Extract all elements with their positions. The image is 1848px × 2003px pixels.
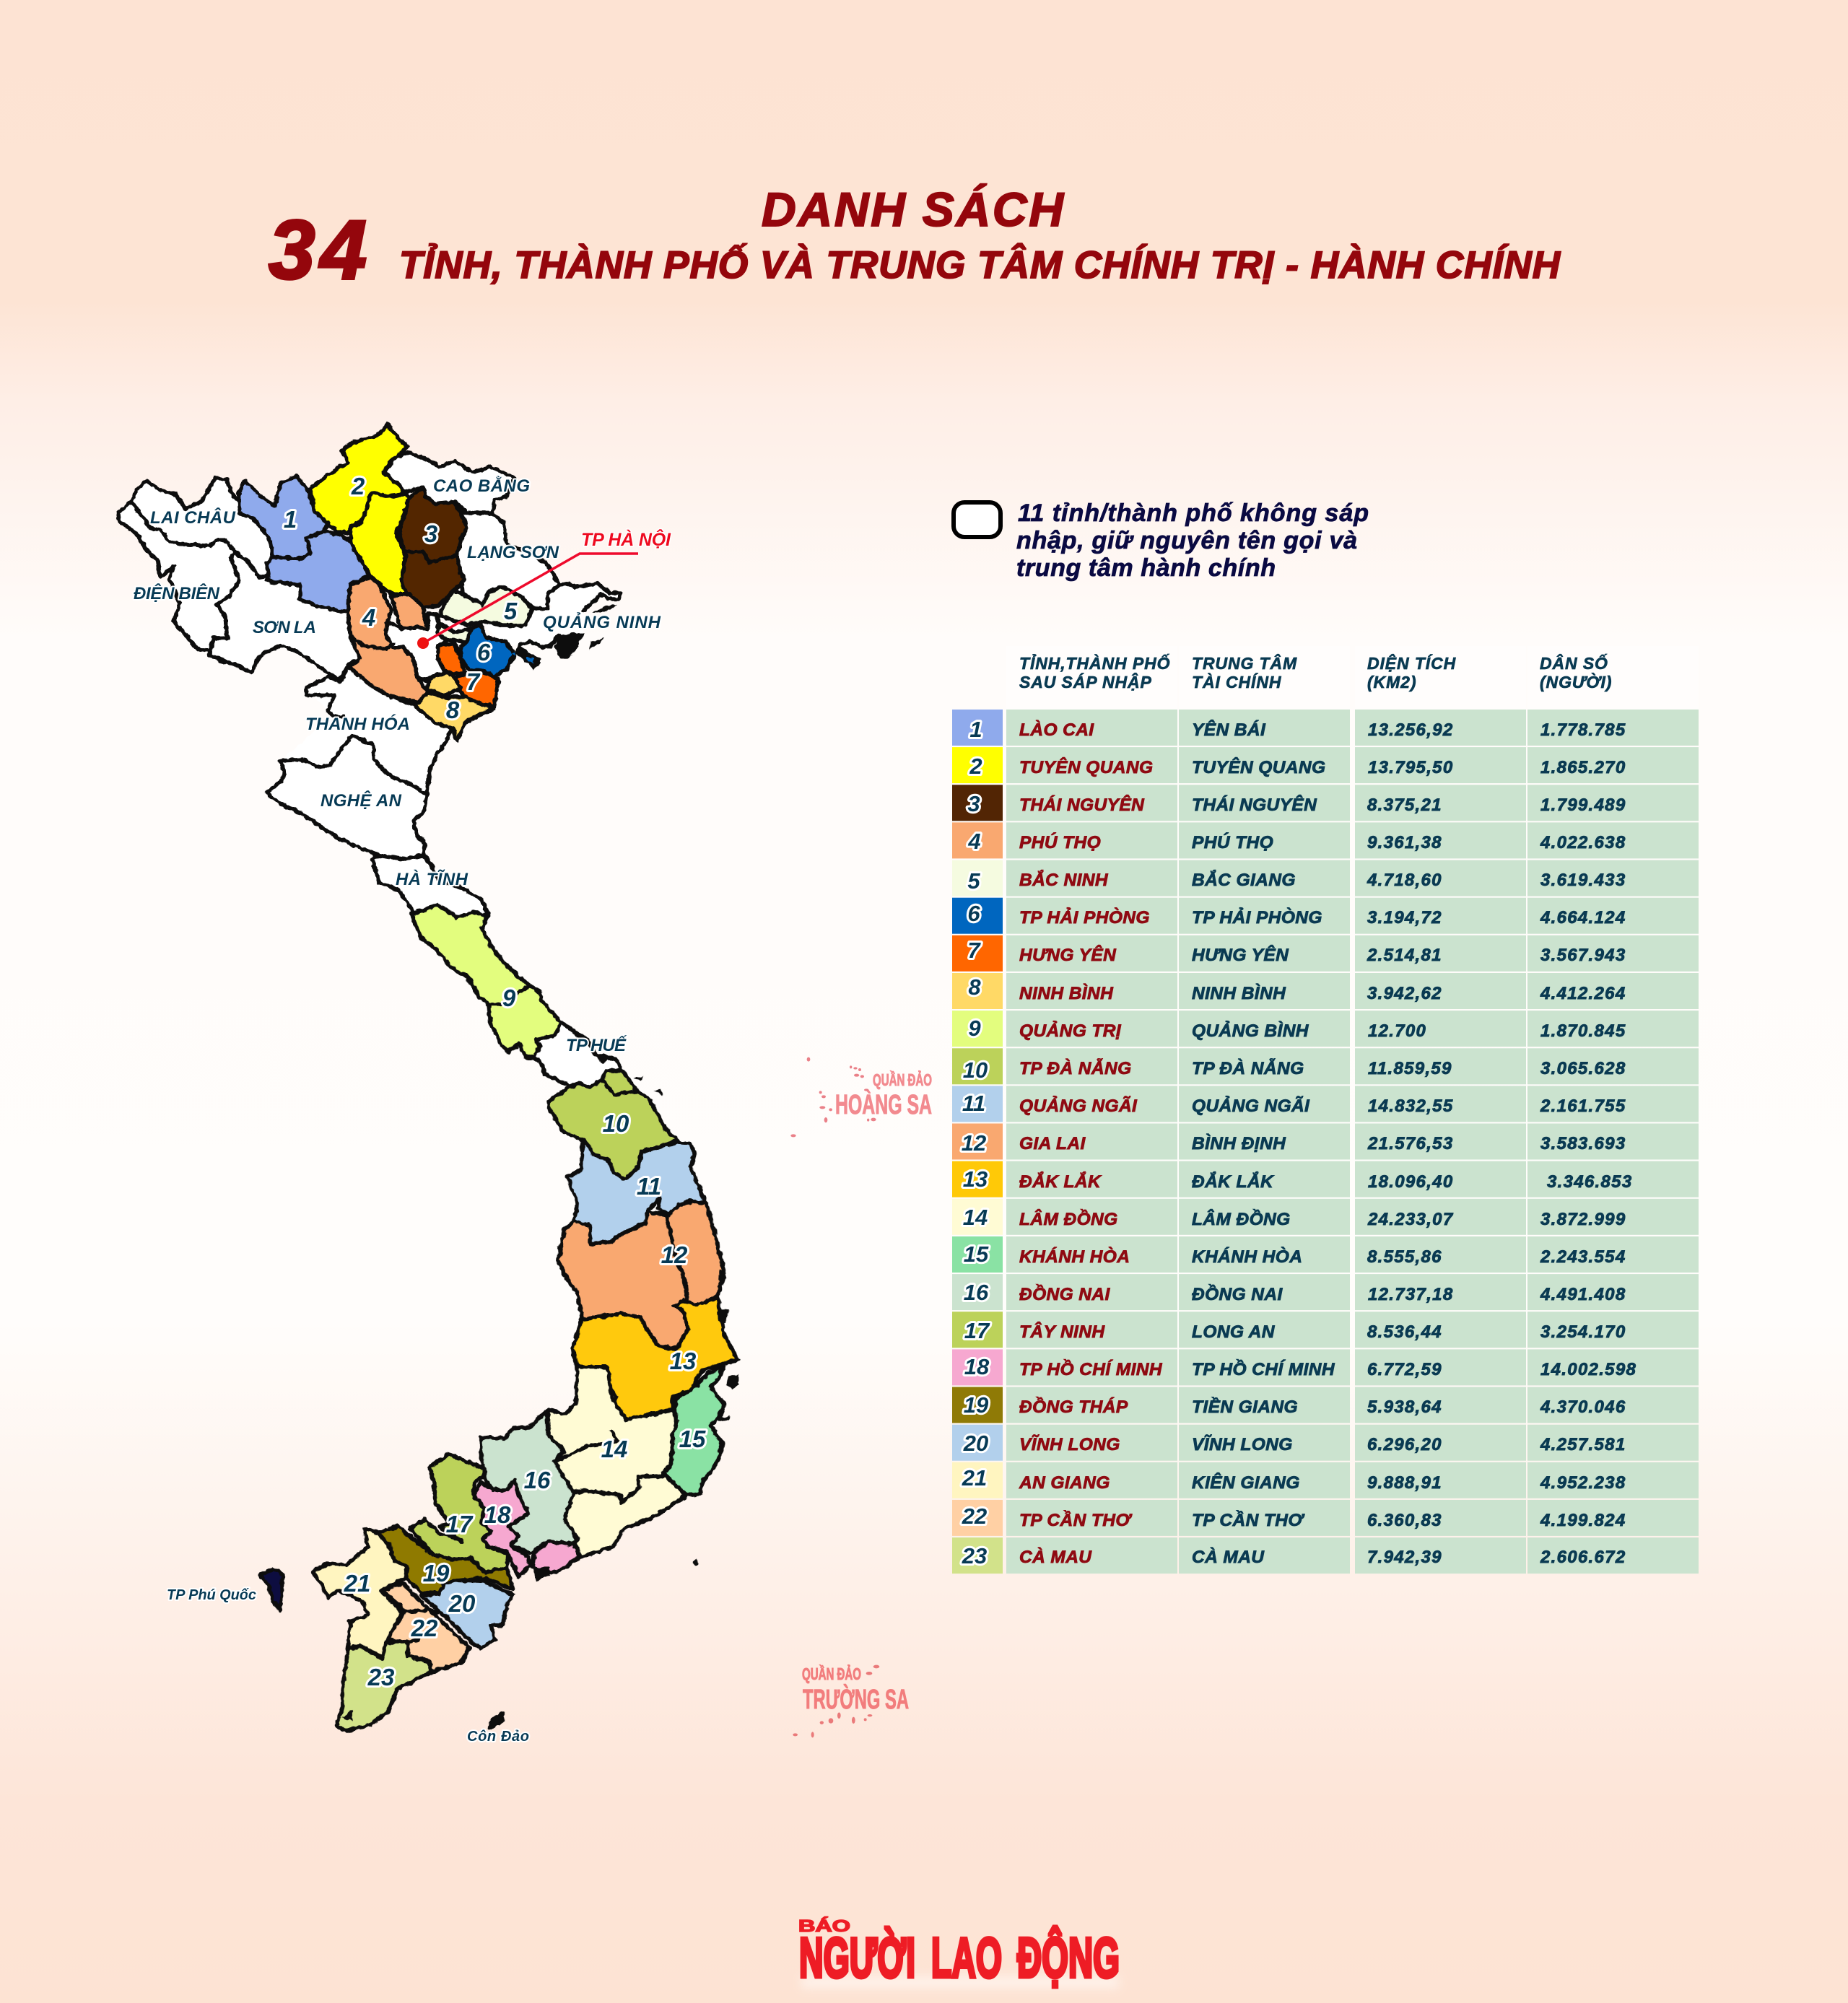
row 5: 4.718,60 <box>1367 870 1442 890</box>
province number labels on map: 5 <box>504 598 518 624</box>
row 5: 3.619.433 <box>1540 870 1626 890</box>
row 5: BẮC NINH <box>1019 870 1109 890</box>
region: Nghe An <box>267 736 427 859</box>
province number labels on map: 17 <box>446 1511 474 1537</box>
row 9: 12.700 <box>1368 1021 1426 1041</box>
row 2: 2 <box>969 754 982 779</box>
row 1: LÀO CAI <box>1019 720 1094 740</box>
region 21: An Giang <box>313 1529 408 1659</box>
region 11: Quang Ngai <box>567 1140 706 1244</box>
province name labels: SƠN LA <box>253 618 316 637</box>
region 19: Dong Thap <box>378 1526 513 1593</box>
province number labels on map: 1 <box>284 506 297 533</box>
row 6: 3.194,72 <box>1367 908 1442 928</box>
Hoang Sa label: HOÀNG SA <box>835 1088 932 1120</box>
province number labels on map: 22 <box>411 1615 438 1641</box>
province name labels: TP Phú Quốc <box>167 1587 256 1603</box>
region 10: Da Nang <box>549 1070 679 1179</box>
Hoang Sa label: QUẦN ĐẢO <box>873 1069 932 1089</box>
southern provinces <box>260 1366 738 1731</box>
province number labels on map: 6 <box>477 639 491 666</box>
row 4: PHÚ THỌ <box>1192 832 1273 852</box>
row 9 <box>952 1011 1699 1047</box>
Hoang Sa islets <box>790 1057 876 1137</box>
row 17 <box>952 1312 1699 1348</box>
row 18: 18 <box>964 1354 990 1379</box>
row 23: 7.942,39 <box>1367 1548 1442 1567</box>
province name labels: LAI CHÂU <box>150 507 236 528</box>
row 15: 8.555,86 <box>1367 1247 1442 1267</box>
region: Ha Tinh <box>372 855 489 918</box>
province number labels on map: 2 <box>351 473 365 499</box>
row 19: 4.370.046 <box>1540 1397 1626 1417</box>
row 23: CÀ MAU <box>1019 1547 1092 1567</box>
row 11: 11 <box>962 1091 985 1116</box>
row 6: 4.664.124 <box>1540 908 1626 928</box>
label: TP Ha Noi: TP HÀ NỘI <box>581 528 671 550</box>
row 22: TP CẦN THƠ <box>1019 1510 1133 1530</box>
row 11: QUẢNG NGÃI <box>1192 1096 1310 1116</box>
legend text <box>1016 499 1369 582</box>
row 3 <box>952 785 1699 821</box>
row 19: 5.938,64 <box>1367 1397 1442 1417</box>
row 18: 14.002.598 <box>1540 1360 1636 1379</box>
row 6 <box>952 898 1699 934</box>
logo: Bao Nguoi Lao Dong: BÁO <box>798 1916 850 1935</box>
row 16: 12.737,18 <box>1368 1285 1453 1304</box>
row 10: 11.859,59 <box>1368 1059 1452 1078</box>
Truong Sa label: QUẦN ĐẢO <box>802 1663 861 1683</box>
row 13: 18.096,40 <box>1368 1172 1453 1192</box>
row 23: CÀ MAU <box>1192 1547 1265 1567</box>
province name labels: NGHỆ AN <box>321 790 402 811</box>
island: Phu Quy <box>693 1559 698 1566</box>
logo: Bao Nguoi Lao Dong: ĐỘNG <box>1017 1926 1120 1989</box>
row 12: BÌNH ĐỊNH <box>1192 1133 1286 1153</box>
row 15: KHÁNH HÒA <box>1192 1247 1302 1267</box>
province name labels: CAO BẰNG <box>433 476 530 496</box>
table header: TỈNH,THÀNH PHỐ <box>1019 653 1170 673</box>
row 6: TP HẢI PHÒNG <box>1019 907 1150 928</box>
row 20: 20 <box>963 1431 988 1456</box>
logo: Bao Nguoi Lao Dong: LAO <box>931 1926 1002 1989</box>
province name labels: LẠNG SƠN <box>467 543 559 562</box>
region 9: Quang Tri <box>411 905 561 1057</box>
table header: SAU SÁP NHẬP <box>1019 672 1152 691</box>
row 11: 2.161.755 <box>1540 1096 1626 1116</box>
region: Ha Noi <box>385 614 447 681</box>
row 9: 9 <box>968 1016 981 1041</box>
row 17: 3.254.170 <box>1540 1322 1626 1342</box>
row 10 <box>952 1048 1699 1084</box>
row 11 <box>952 1086 1699 1122</box>
row 8 <box>952 973 1699 1009</box>
row 16: ĐỒNG NAI <box>1019 1284 1110 1304</box>
row 20: 6.296,20 <box>1367 1435 1442 1454</box>
legend text: 11 tỉnh/thành phố không sáp <box>1018 499 1369 527</box>
data table <box>952 646 1699 1574</box>
row 20 <box>952 1425 1699 1461</box>
row 14: LÂM ĐỒNG <box>1192 1209 1291 1229</box>
region: Cao Bang <box>383 452 514 513</box>
row 17: LONG AN <box>1192 1322 1276 1342</box>
region 18: TP HCM <box>473 1480 580 1581</box>
row 17: TÂY NINH <box>1019 1322 1105 1342</box>
region 7: Hung Yen <box>437 644 498 706</box>
province name labels: HÀ TĨNH <box>396 869 468 889</box>
row 7: HƯNG YÊN <box>1192 945 1289 965</box>
row 7 <box>952 935 1699 972</box>
province name labels: QUẢNG NINH <box>543 612 661 632</box>
row 17: 8.536,44 <box>1367 1322 1442 1342</box>
province number labels on map: 9 <box>502 985 516 1011</box>
row 21: AN GIANG <box>1019 1473 1110 1493</box>
region: Son La <box>209 551 359 681</box>
region 23: Ca Mau <box>336 1642 432 1731</box>
table header: TRUNG TÂM <box>1192 653 1297 673</box>
region 22: Can Tho <box>382 1583 469 1672</box>
region 17: Tay Ninh <box>409 1454 509 1573</box>
row 12: 12 <box>962 1130 986 1156</box>
legend swatch <box>954 502 1001 537</box>
row 2: 13.795,50 <box>1368 758 1453 777</box>
heading: subtitle: TỈNH, THÀNH PHỐ VÀ TRUNG TÂM CHÍNH TRỊ - HÀNH CHÍNH <box>399 243 1561 287</box>
row 3: 1.799.489 <box>1540 795 1626 815</box>
row 16: 16 <box>964 1280 989 1305</box>
map shapes <box>118 424 738 1731</box>
legend text: nhập, giữ nguyên tên gọi và <box>1016 527 1357 554</box>
province number labels on map: 20 <box>448 1590 476 1617</box>
region 15: Khanh Hoa <box>663 1366 738 1495</box>
province name labels: THANH HÓA <box>305 714 410 734</box>
row 19: TIỀN GIANG <box>1192 1397 1298 1417</box>
Truong Sa archipelago <box>793 1663 909 1737</box>
row 22: TP CẦN THƠ <box>1192 1510 1305 1530</box>
row 23: 2.606.672 <box>1540 1548 1626 1567</box>
province number labels on map: 21 <box>344 1570 370 1597</box>
row 21: 9.888,91 <box>1367 1473 1442 1493</box>
row 18: 6.772,59 <box>1367 1360 1442 1379</box>
row 21: 4.952.238 <box>1540 1473 1626 1493</box>
region 4: Phu Tho <box>348 577 427 702</box>
Truong Sa label: TRƯỜNG SA <box>803 1683 909 1715</box>
table header: (KM2) <box>1367 673 1416 691</box>
legend text: trung tâm hành chính <box>1016 554 1276 582</box>
row 1: 1 <box>969 717 982 742</box>
row 16: ĐỒNG NAI <box>1192 1284 1283 1304</box>
row 9: QUẢNG TRỊ <box>1019 1021 1122 1041</box>
row 8: 8 <box>968 974 981 1000</box>
row 20: VĨNH LONG <box>1019 1435 1120 1454</box>
row 8: 3.942,62 <box>1367 984 1442 1003</box>
province number labels on map: 4 <box>362 604 375 631</box>
logo: Bao Nguoi Lao Dong <box>798 1916 1120 1989</box>
province number labels on map: 14 <box>601 1436 627 1462</box>
province name labels: ĐIỆN BIÊN <box>134 583 220 603</box>
province number labels on map: 8 <box>446 697 460 723</box>
row 3: THÁI NGUYÊN <box>1019 795 1145 815</box>
region 6: Hai Phong <box>461 625 514 677</box>
row 20: VĨNH LONG <box>1192 1435 1293 1454</box>
row 4: 4 <box>967 829 981 854</box>
row 4: PHÚ THỌ <box>1019 832 1101 852</box>
row 15: 2.243.554 <box>1540 1247 1626 1267</box>
row 19: ĐỒNG THÁP <box>1019 1397 1128 1417</box>
row 1 <box>952 710 1699 746</box>
row 8: 4.412.264 <box>1540 984 1626 1003</box>
row 18: TP HỒ CHÍ MINH <box>1019 1359 1163 1379</box>
row 13 <box>952 1161 1699 1197</box>
row 16: 4.491.408 <box>1540 1285 1626 1304</box>
row 15 <box>952 1236 1699 1273</box>
row 8: NINH BÌNH <box>1019 983 1114 1003</box>
province number labels on map <box>284 473 706 1690</box>
row 5: BẮC GIANG <box>1192 870 1296 890</box>
province number labels on map: 16 <box>524 1467 551 1493</box>
row 21 <box>952 1462 1699 1498</box>
row 10: TP ĐÀ NẴNG <box>1192 1058 1304 1078</box>
title <box>269 183 1561 297</box>
row 22 <box>952 1500 1699 1536</box>
row 19: 19 <box>964 1392 989 1418</box>
row 4: 9.361,38 <box>1367 833 1442 852</box>
row 19 <box>952 1387 1699 1423</box>
big number 34: 34 <box>269 203 367 297</box>
province number labels on map: 3 <box>424 520 437 547</box>
province number labels on map: 23 <box>367 1664 394 1690</box>
row 9: 1.870.845 <box>1540 1021 1626 1041</box>
row 5: 5 <box>967 868 980 894</box>
row 13: 13 <box>963 1166 988 1192</box>
table header: DÂN SỐ <box>1540 653 1608 673</box>
row 10: 3.065.628 <box>1540 1059 1626 1078</box>
region: Lang Son <box>457 513 559 608</box>
row 7: HƯNG YÊN <box>1019 945 1117 965</box>
row 18: TP HỒ CHÍ MINH <box>1192 1359 1335 1379</box>
row 4 <box>952 822 1699 858</box>
row 16 <box>952 1274 1699 1310</box>
row 18 <box>952 1349 1699 1385</box>
row 15: KHÁNH HÒA <box>1019 1247 1130 1267</box>
row 7: 7 <box>967 938 981 963</box>
region 1: Lao Cai <box>239 476 370 612</box>
table header: DIỆN TÍCH <box>1367 653 1456 673</box>
region 2: Tuyen Quang <box>310 424 409 594</box>
table header: TÀI CHÍNH <box>1192 672 1281 691</box>
Ha Noi pointer line <box>417 554 638 649</box>
region 20: Vinh Long <box>422 1580 513 1649</box>
row 23 <box>952 1537 1699 1574</box>
region: Thanh Hoa <box>281 666 451 795</box>
legend <box>954 499 1369 582</box>
row 3: THÁI NGUYÊN <box>1192 795 1317 815</box>
row 22: 22 <box>962 1504 987 1529</box>
row 1: 1.778.785 <box>1540 720 1626 740</box>
row 7: 2.514,81 <box>1367 946 1442 965</box>
row 11: QUẢNG NGÃI <box>1019 1096 1138 1116</box>
Truong Sa islets <box>793 1665 879 1737</box>
row 3: 3 <box>967 791 980 816</box>
region 5: Bac Ninh <box>437 587 532 642</box>
row 22: 4.199.824 <box>1540 1511 1626 1530</box>
row 1: YÊN BÁI <box>1192 720 1266 740</box>
row 2: TUYÊN QUANG <box>1019 757 1153 777</box>
region 8: Ninh Binh <box>414 673 494 741</box>
row 4: 4.022.638 <box>1540 833 1626 852</box>
map of Vietnam <box>118 424 1699 1989</box>
row 2: 1.865.270 <box>1540 758 1626 777</box>
row 20: 4.257.581 <box>1540 1435 1626 1454</box>
row 13: ĐẮK LẮK <box>1019 1171 1102 1192</box>
province number labels on map: 7 <box>466 668 481 695</box>
logo: Bao Nguoi Lao Dong: NGƯỜI <box>799 1926 915 1989</box>
central provinces <box>411 905 738 1421</box>
row 10: 10 <box>963 1057 988 1083</box>
region: Quang Ninh <box>486 583 621 659</box>
row 12: GIA LAI <box>1019 1134 1086 1153</box>
row 15: 15 <box>964 1241 989 1267</box>
region 3: Thai Nguyen <box>399 487 467 607</box>
row 22: 6.360,83 <box>1367 1511 1442 1530</box>
region: Dien Bien <box>118 502 239 651</box>
province number labels on map: 11 <box>637 1173 661 1200</box>
row 13: ĐẮK LẮK <box>1192 1171 1275 1192</box>
row 7: 3.567.943 <box>1540 946 1626 965</box>
row 14: LÂM ĐỒNG <box>1019 1209 1118 1229</box>
row 1: 13.256,92 <box>1368 720 1453 740</box>
row 14: 3.872.999 <box>1540 1210 1626 1229</box>
region 13: Dak Lak <box>572 1297 738 1421</box>
row 5 <box>952 860 1699 896</box>
row 2 <box>952 747 1699 783</box>
province number labels on map: 19 <box>423 1560 450 1587</box>
row 2: TUYÊN QUANG <box>1192 757 1325 777</box>
row 10: TP ĐÀ NẴNG <box>1019 1058 1132 1078</box>
province number labels on map: 10 <box>603 1110 629 1137</box>
row 21: 21 <box>962 1465 987 1491</box>
heading: danh sach: DANH SÁCH <box>762 183 1064 236</box>
province name labels <box>134 476 661 1745</box>
row 12: 21.576,53 <box>1367 1134 1453 1153</box>
province name labels: TP HUẾ <box>566 1035 627 1055</box>
Hai Phong islands <box>511 644 541 670</box>
row 17: 17 <box>964 1318 990 1343</box>
Hoang Sa label <box>835 1069 932 1120</box>
northern provinces <box>118 424 559 918</box>
province number labels on map: 18 <box>484 1501 511 1528</box>
province number labels on map: 15 <box>679 1426 706 1452</box>
region 12: Gia Lai <box>558 1201 726 1348</box>
Truong Sa label <box>802 1663 909 1715</box>
island: Con Dao <box>491 1714 502 1727</box>
province name labels: Côn Đảo <box>467 1729 529 1745</box>
table header: (NGƯỜI) <box>1540 672 1612 691</box>
region: TP Hue <box>533 1023 622 1087</box>
island: Phu Quoc <box>260 1568 283 1610</box>
row 6: TP HẢI PHÒNG <box>1192 907 1322 928</box>
region 14: Lam Dong <box>548 1367 687 1557</box>
province number labels on map: 12 <box>661 1241 688 1268</box>
row 23: 23 <box>962 1543 987 1568</box>
row 12: 3.583.693 <box>1540 1134 1626 1153</box>
row 14: 24.233,07 <box>1367 1210 1454 1229</box>
table header <box>1006 646 1699 710</box>
row 14 <box>952 1199 1699 1235</box>
row 13: 3.346.853 <box>1547 1172 1632 1192</box>
row 8: NINH BÌNH <box>1192 983 1286 1003</box>
region: Lai Chau <box>132 478 273 577</box>
row 11: 14.832,55 <box>1368 1096 1453 1116</box>
row 9: QUẢNG BÌNH <box>1192 1021 1309 1041</box>
row 14: 14 <box>963 1205 988 1230</box>
province number labels on map: 13 <box>670 1348 696 1374</box>
Hoang Sa archipelago <box>790 1057 932 1137</box>
row 3: 8.375,21 <box>1367 795 1442 815</box>
row 6: 6 <box>967 901 980 926</box>
row 12 <box>952 1123 1699 1159</box>
row 21: KIÊN GIANG <box>1192 1472 1300 1493</box>
region 16: Dong Nai <box>481 1411 578 1553</box>
